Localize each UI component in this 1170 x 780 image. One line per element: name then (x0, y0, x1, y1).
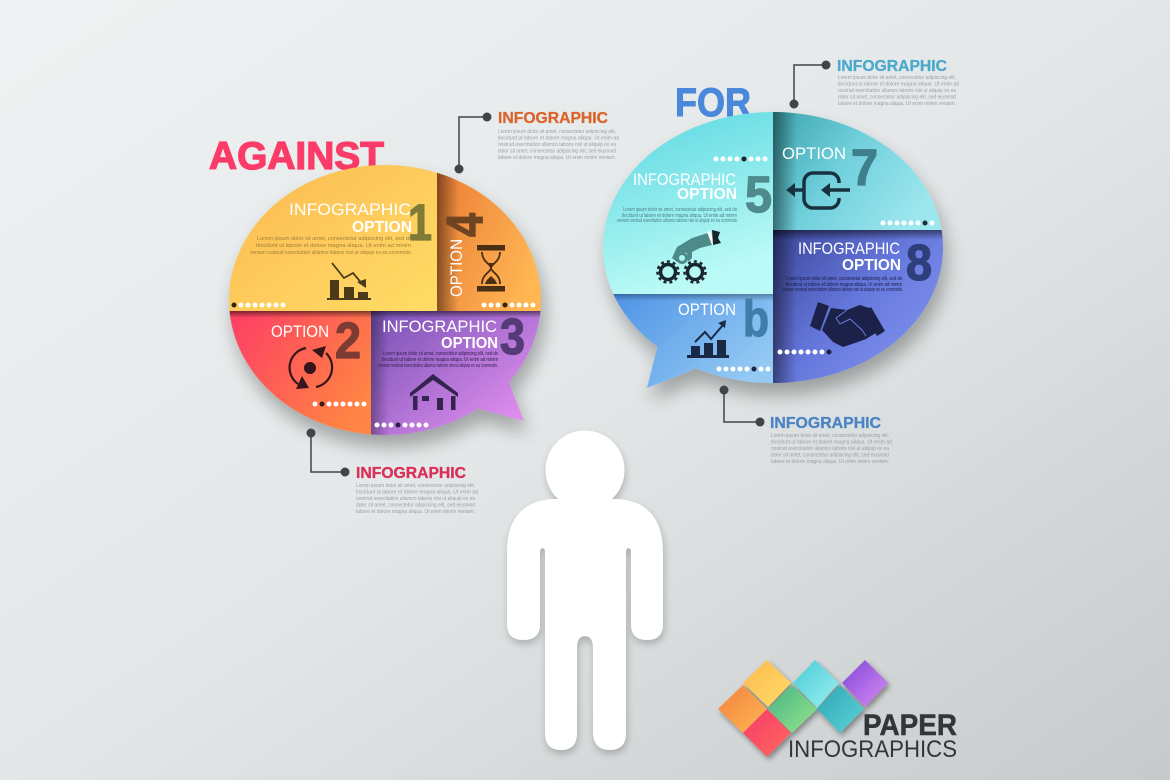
icon: falling bar chart (327, 263, 371, 300)
body text (617, 207, 738, 224)
body text: tincidunt ut labore et dolore magna aliqua. Ut enim ad (356, 490, 478, 496)
heading: AGAINST: AGAINST (209, 135, 384, 178)
body text: tincidunt ut labore et dolore magna aliqua. Ut enim ad minim (622, 213, 737, 219)
number 1: 1 (408, 194, 432, 251)
logo: paper infographics: INFOGRAPHICS (788, 736, 957, 763)
option 4 content (436, 212, 536, 308)
body text (498, 129, 619, 161)
number 3: 3 (500, 308, 525, 365)
label: infographic option 8: INFOGRAPHIC (798, 239, 900, 258)
body text: labore et dolore magna aliqua. Ut enim minim veniam. (356, 509, 475, 515)
pagination dots (374, 422, 428, 428)
option 3 content (374, 308, 525, 428)
speech bubble: against (225, 160, 547, 441)
label: option 6: OPTION (678, 300, 736, 319)
figure: white paper person (507, 430, 663, 750)
heading: INFOGRAPHIC (837, 58, 947, 75)
panel: option 6 fill (600, 294, 773, 394)
heading: INFOGRAPHIC (356, 465, 466, 482)
body text: tincidunt ut labore et dolore magna aliqua. Ut enim ad (771, 440, 892, 446)
body text (378, 351, 498, 369)
pagination dots (714, 156, 768, 162)
body text: veniam nostrud exercitation ullamco laboris nisi ut aliquip ex ea commodo. (782, 287, 903, 293)
body text: dolor sit amet, consectetur adipiscing elit, sed eiusmod (498, 148, 616, 154)
body text: veniam nostrud exercitation ullamco laboris nisi ut aliquip ex ea commodo. (250, 250, 412, 256)
option 1 content (232, 194, 432, 308)
pagination dots (482, 302, 536, 308)
body text: nostrud exercitation ullamco laboris nisi ut aliquip ex ea (356, 496, 475, 502)
heading: INFOGRAPHIC (498, 110, 608, 127)
panel: option 3 fill (371, 311, 546, 441)
body text: tincidunt ut labore et dolore magna aliqua. Ut enim ad minim (786, 282, 902, 288)
body text (771, 433, 892, 465)
option 3 content: OPTION (441, 335, 498, 352)
body text: labore et dolore magna aliqua. Ut enim minim veniam. (838, 101, 956, 107)
body text: veniam nostrud exercitation ullamco laboris nisi ut aliquip ex ea commodo. (617, 218, 738, 224)
pagination dots (880, 220, 934, 226)
body text: Lorem ipsum dolor sit amet, consectetur adipiscing elit, sed do (623, 207, 737, 213)
body text: dolor sit amet, consectetur adipiscing elit, sed eiusmod (771, 452, 889, 458)
option 5 content (617, 156, 772, 282)
panel: option 4 fill (437, 160, 547, 311)
body text: Lorem ipsum dolor sit amet, consectetur adipiscing elit, (356, 483, 475, 489)
icon: house (410, 374, 458, 410)
number 7: 7 (851, 139, 878, 196)
panel: option 5 fill (600, 108, 773, 294)
icon: hourglass (477, 245, 505, 292)
icon: refresh cycle (290, 346, 332, 389)
body text: nostrud exercitation ullamco laboris nisi ut aliquip ex ea (498, 142, 616, 148)
option 6 content (678, 290, 770, 372)
connector (454, 112, 492, 174)
number 2: 2 (335, 312, 361, 369)
speech bubble: for (600, 108, 948, 394)
connector (720, 386, 764, 426)
logo: paper infographics (718, 660, 957, 763)
callout: for top (790, 58, 959, 108)
panel: option 1 fill (225, 160, 437, 311)
body text: tincidunt ut labore et dolore magna aliqua. Ut enim ad (838, 82, 959, 88)
pagination dots (312, 402, 366, 406)
option 8 content: OPTION (842, 257, 901, 274)
icon: handshake (810, 302, 885, 347)
icon: hand turning gears (658, 230, 721, 282)
label: infographic option 5: INFOGRAPHIC (633, 170, 736, 189)
body text (838, 75, 959, 107)
number 5: 5 (745, 166, 772, 223)
callout: against top (454, 110, 619, 174)
body text (250, 236, 412, 256)
label: infographic option 3: INFOGRAPHIC (382, 317, 497, 336)
body text: Lorem ipsum dolor sit amet, consectetur adipiscing elit, (498, 129, 616, 135)
body text (356, 483, 478, 515)
panel: option 8 fill (773, 230, 948, 388)
body text: nostrud exercitation ullamco laboris nisi ut aliquip ex ea (838, 88, 956, 94)
body text: Lorem ipsum dolor sit amet, consectetur adipiscing elit, sed do (786, 276, 902, 282)
label: rotated option 4: OPTION (447, 239, 466, 297)
callout: for bottom (720, 386, 892, 465)
option 5 content: OPTION (677, 186, 737, 203)
body text: tincidunt ut labore et dolore magna aliqua. Ut enim ad minim (382, 357, 498, 363)
pagination dots (232, 302, 286, 308)
body text: tincidunt ut labore et dolore magna aliqua. Ut enim ad minim (256, 243, 411, 249)
logo diamonds (718, 660, 888, 757)
label: option 2: OPTION (271, 322, 329, 341)
option 8 content (778, 234, 932, 354)
connector (790, 60, 830, 108)
body text: nostrud exercitation ullamco laboris nisi ut aliquip ex ea (771, 446, 889, 452)
body text: labore et dolore magna aliqua. Ut enim minim veniam. (498, 155, 616, 161)
panel: option 2 fill (225, 311, 371, 441)
body text: dolor sit amet, consectetur adipiscing elit, sed eiusmod (838, 94, 956, 100)
body text: dolor sit amet, consectetur adipiscing elit, sed eiusmod (356, 502, 475, 508)
number 8: 8 (906, 234, 932, 291)
option 1 content: OPTION (352, 219, 412, 236)
logo wordmark: PAPER (863, 709, 957, 742)
body text: Lorem ipsum dolor sit amet, consectetur adipiscing elit, sed do (383, 351, 498, 357)
body text: Lorem ipsum dolor sit amet, consectetur adipiscing elit, sed do (257, 236, 412, 242)
body text (782, 276, 903, 293)
pagination dots (778, 350, 832, 354)
callout: against bottom (306, 428, 478, 515)
option 2 content (271, 312, 366, 406)
panel: option 7 fill (773, 108, 948, 230)
body text: Lorem ipsum dolor sit amet, consectetur adipiscing elit, (771, 433, 889, 439)
icon: arrows through door (786, 173, 850, 208)
body text: Lorem ipsum dolor sit amet, consectetur adipiscing elit, (838, 75, 956, 81)
body text: veniam nostrud exercitation ullamco laboris nisi ut aliquip ex ea commodo. (378, 363, 498, 369)
body text: labore et dolore magna aliqua. Ut enim minim veniam. (771, 459, 889, 465)
option 7 content (782, 139, 934, 226)
body text: tincidunt ut labore et dolore magna aliqua. Ut enim ad (498, 136, 619, 142)
icon: rising bar chart (687, 320, 729, 358)
heading: FOR: FOR (675, 81, 751, 125)
number 4: 4 (436, 212, 493, 237)
heading: INFOGRAPHIC (770, 415, 881, 432)
label: infographic option 1: INFOGRAPHIC (289, 200, 411, 219)
number 6: b (743, 290, 769, 347)
label: option 7: OPTION (782, 144, 846, 163)
connector (306, 428, 350, 476)
pagination dots (716, 366, 770, 372)
